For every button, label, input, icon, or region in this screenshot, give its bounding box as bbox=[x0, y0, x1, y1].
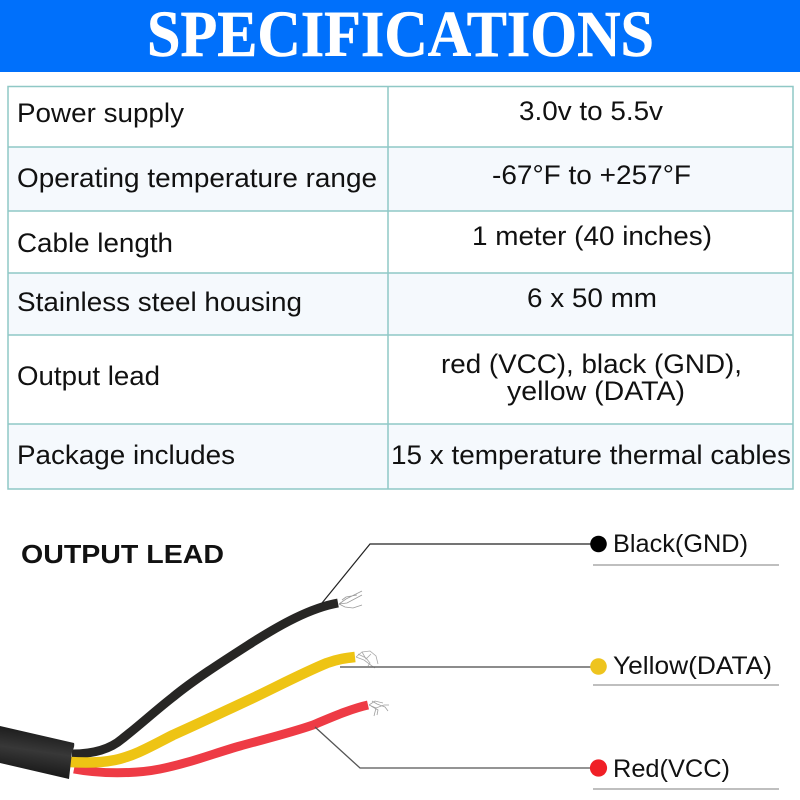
row: output lead: yellow (DATA) bbox=[507, 376, 685, 406]
header banner bbox=[0, 0, 800, 72]
row: power supply bbox=[17, 96, 664, 128]
row: package includes: Package includes bbox=[17, 440, 235, 470]
title: SPECIFICATIONS bbox=[147, 0, 654, 71]
yellow wire bbox=[70, 651, 378, 763]
row: operating temperature range: Operating temperature range bbox=[17, 163, 377, 193]
row: stainless steel housing: Stainless steel housing bbox=[17, 287, 302, 317]
row: operating temperature range bbox=[17, 160, 691, 193]
black wire bbox=[72, 591, 362, 754]
row: cable length: 1 meter (40 inches) bbox=[472, 221, 712, 251]
yellow lead callout bbox=[340, 652, 779, 685]
label: yellow: Yellow(DATA) bbox=[613, 652, 772, 680]
label: red: Red(VCC) bbox=[613, 755, 730, 783]
row: power supply: Power supply bbox=[17, 98, 185, 128]
row: power supply: 3.0v to 5.5v bbox=[519, 96, 664, 126]
red wire bbox=[74, 701, 389, 773]
label: black: Black(GND) bbox=[613, 530, 748, 558]
cable jacket bbox=[0, 726, 74, 779]
output lead heading: OUTPUT LEAD bbox=[21, 539, 224, 569]
row: cable length: Cable length bbox=[17, 228, 173, 258]
row: operating temperature range: -67°F to +257°F bbox=[492, 160, 691, 190]
row: output lead: Output lead bbox=[17, 361, 160, 391]
icon: red dot bbox=[590, 759, 607, 777]
icon: yellow dot bbox=[590, 658, 607, 675]
row: stainless steel housing bbox=[17, 283, 657, 317]
red lead callout bbox=[315, 727, 779, 789]
row: package includes: 15 x temperature thermal cables bbox=[391, 440, 791, 470]
row: cable length bbox=[17, 221, 712, 258]
icon: black dot bbox=[590, 536, 607, 552]
black lead callout bbox=[322, 530, 779, 603]
cable photo illustration bbox=[0, 591, 389, 779]
row: output lead bbox=[17, 349, 742, 406]
row: stainless steel housing: 6 x 50 mm bbox=[527, 283, 657, 313]
specifications table bbox=[8, 86, 793, 489]
row: output lead: red (VCC), black (GND), bbox=[441, 349, 742, 379]
row: package includes bbox=[17, 440, 791, 470]
